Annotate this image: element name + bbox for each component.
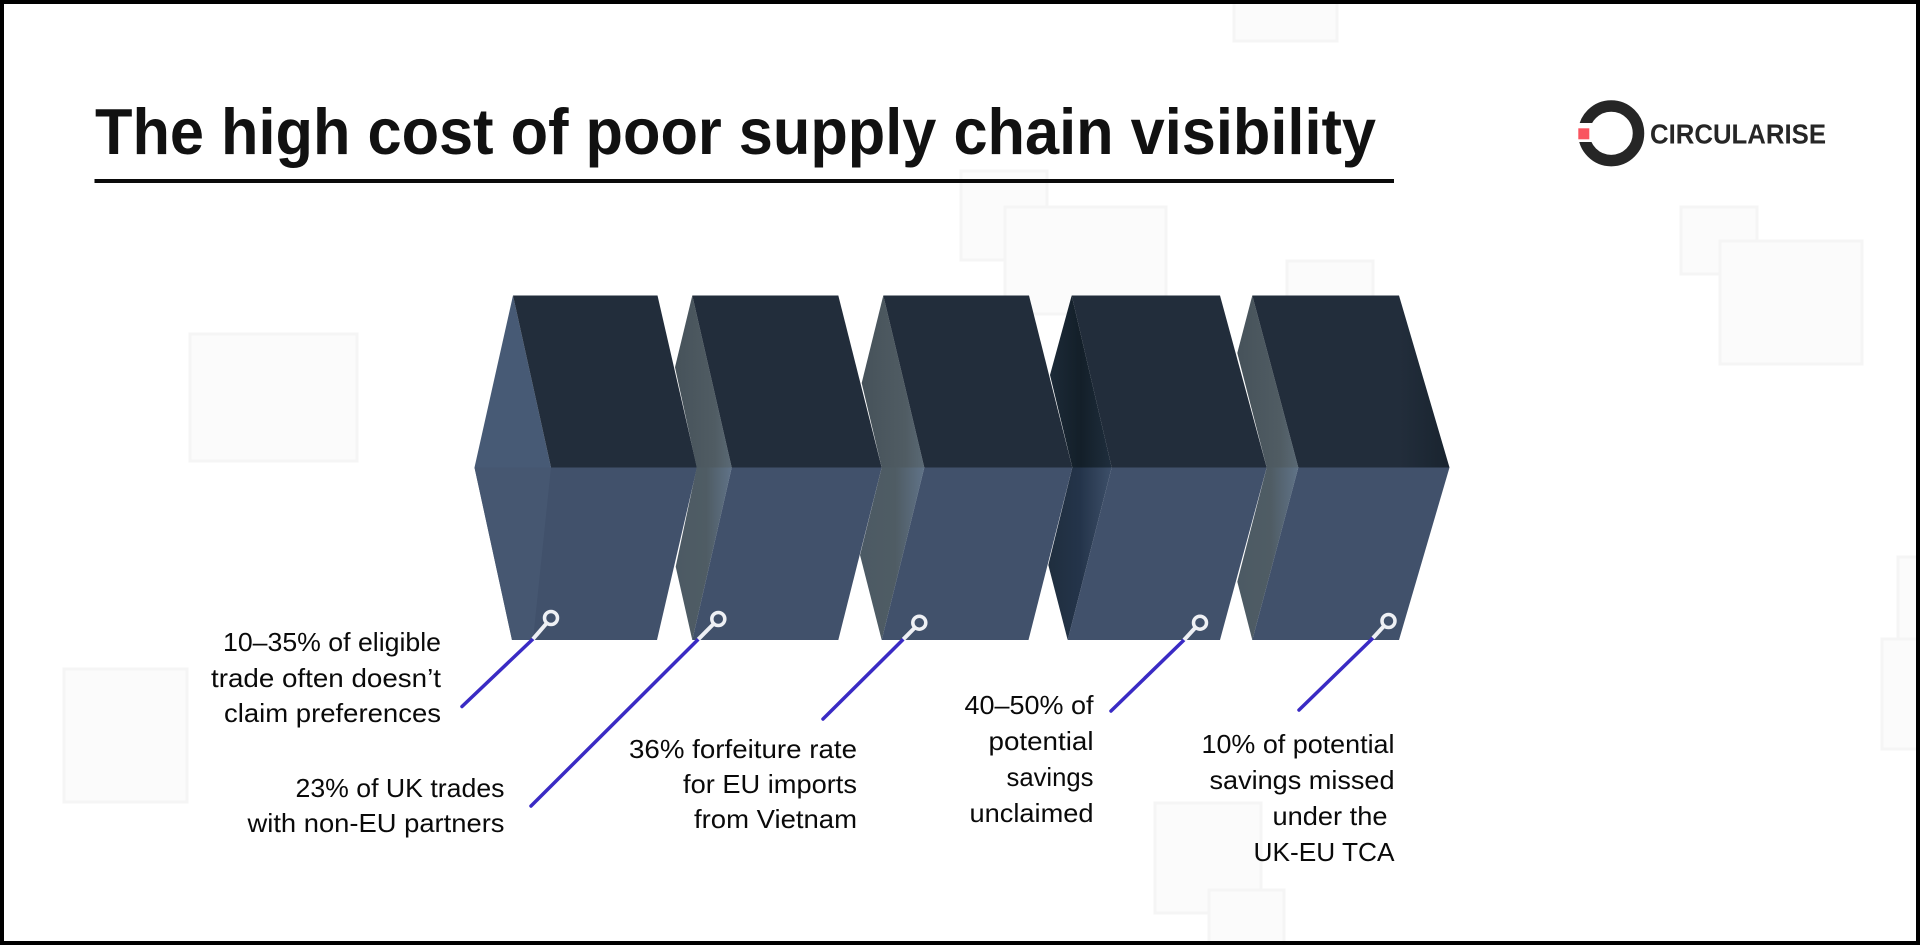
block 4 bbox=[1048, 296, 1267, 640]
title: The high cost of poor supply chain visibility bbox=[95, 95, 1376, 168]
callout text 1: trade often doesn’t bbox=[211, 663, 442, 693]
callout text 4 bbox=[964, 690, 1094, 828]
callout text 5: under the bbox=[1272, 801, 1388, 831]
callout line 5 bbox=[1299, 614, 1395, 710]
callout text 2: with non-EU partners bbox=[246, 808, 504, 838]
callout line 3 bbox=[823, 616, 926, 719]
callout text 3 bbox=[629, 734, 857, 834]
callout line 2 bbox=[531, 612, 725, 806]
block 5 bbox=[1237, 296, 1450, 640]
block 2 bbox=[675, 296, 882, 640]
callout text 1 bbox=[211, 627, 442, 728]
callout text 5: 10% of potential bbox=[1202, 729, 1394, 759]
callout text 4: potential bbox=[988, 726, 1094, 756]
block 3 bbox=[860, 296, 1072, 640]
callout text 4: 40–50% of bbox=[964, 690, 1094, 720]
callout line 1 bbox=[462, 612, 558, 706]
title underline bbox=[94, 179, 1394, 183]
callout text 3: 36% forfeiture rate bbox=[629, 734, 857, 764]
logo: Circularise: CIRCULARISE bbox=[1650, 118, 1826, 149]
callout text 5: UK-EU TCA bbox=[1254, 837, 1395, 867]
callout text 5: savings missed bbox=[1210, 765, 1394, 795]
block 1 bbox=[474, 296, 697, 640]
callout text 1: claim preferences bbox=[224, 698, 441, 728]
callout text 3: from Vietnam bbox=[694, 804, 857, 834]
callout text 1: 10–35% of eligible bbox=[223, 627, 441, 657]
callout text 2: 23% of UK trades bbox=[296, 773, 504, 803]
callout text 4: unclaimed bbox=[970, 798, 1094, 828]
callout line 4 bbox=[1111, 616, 1206, 711]
callout text 3: for EU imports bbox=[683, 769, 857, 799]
callout text 4: savings bbox=[1006, 762, 1094, 792]
callout text 5 bbox=[1202, 729, 1395, 867]
logo: Circularise bbox=[1570, 106, 1826, 161]
callout text 2 bbox=[246, 773, 504, 838]
